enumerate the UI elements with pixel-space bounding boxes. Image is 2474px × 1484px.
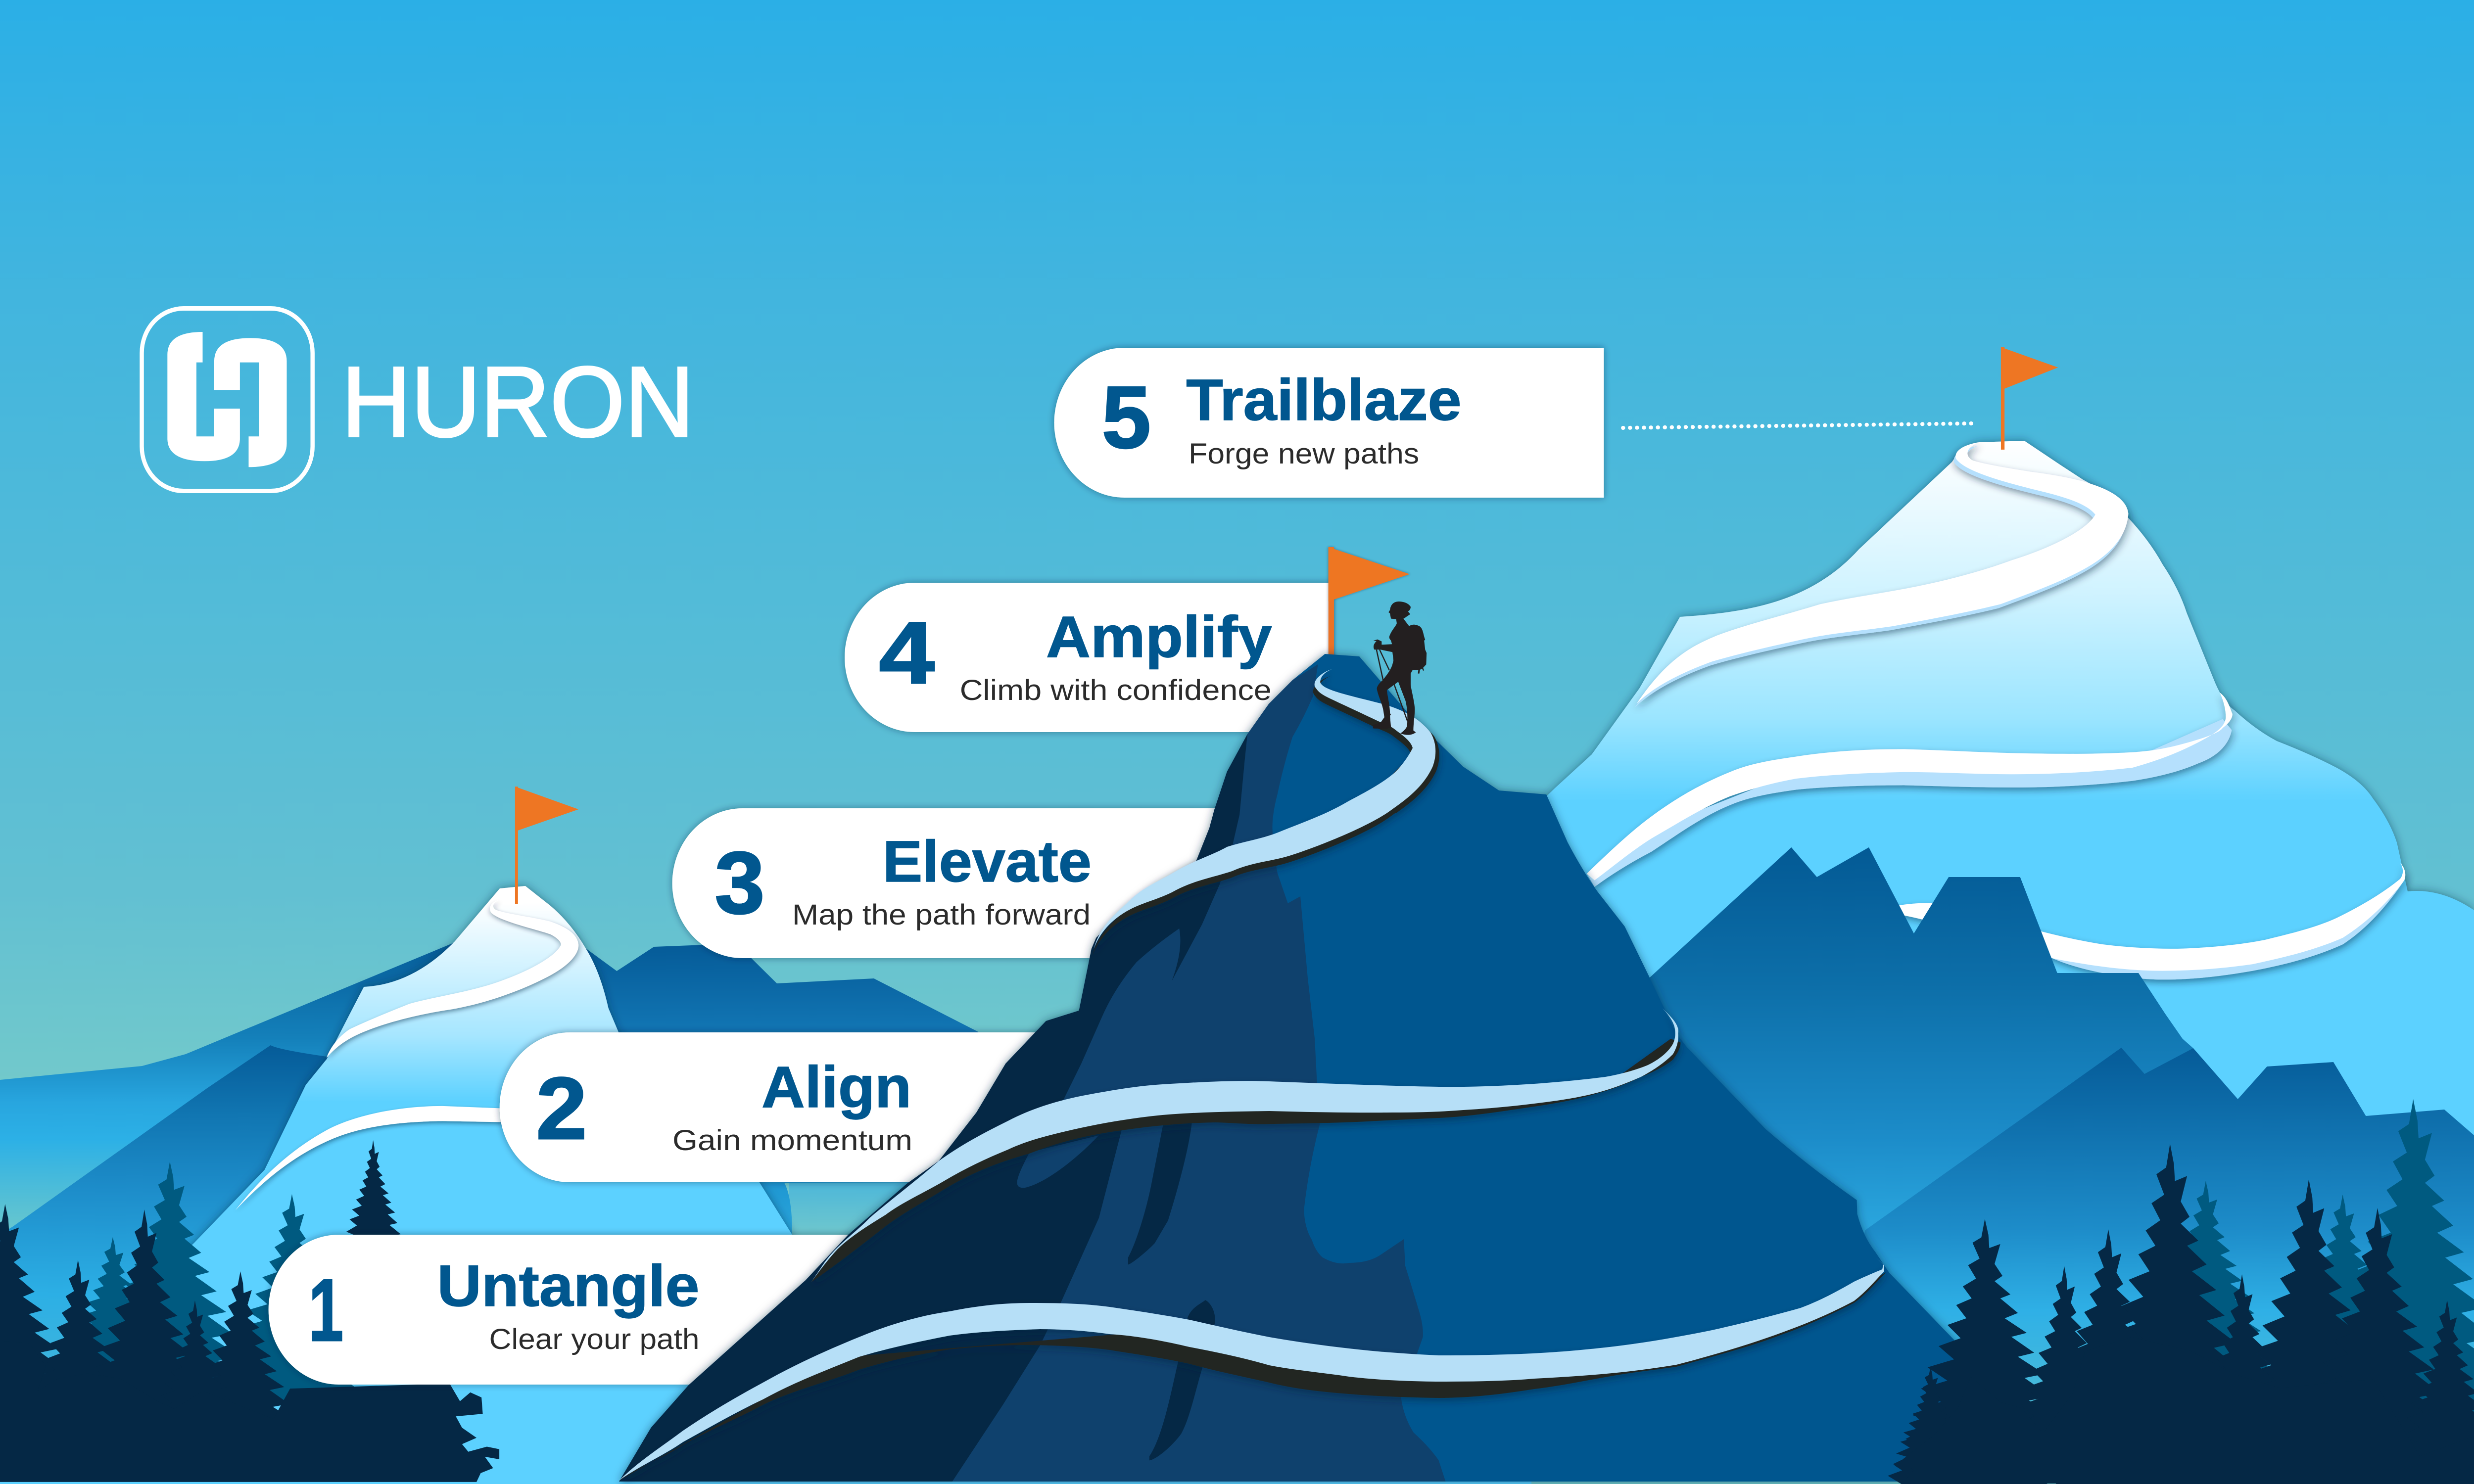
dark streak upper [1128,1121,1192,1264]
left peak snow trail lower [236,1106,509,1210]
right peak flag [2001,347,2058,450]
front right mountain range [1810,1048,2474,1484]
center mountain [603,643,2074,1482]
front left mountain [0,1045,418,1484]
top snow trail [1093,669,1439,956]
patch of sky below step 2 [789,1180,938,1235]
subtitle: Clear your path [489,1323,699,1355]
subtitle: Gain momentum [672,1124,912,1156]
Huron logo [142,309,694,491]
front trees [0,1140,406,1469]
heading: Untangle [437,1253,699,1319]
hiker silhouette [1373,602,1427,735]
subtitle: Climb with confidence [960,674,1272,706]
left peak snow trail upper [327,900,578,1058]
hiker body [1373,602,1427,735]
center summit flag [1329,547,1410,659]
third snow trail [619,1257,1886,1481]
step 3 label: Elevate [672,808,1253,958]
snowy peak shape [0,886,792,1484]
trekking poles [1377,649,1408,721]
dark streak lower [1149,1300,1215,1460]
second snow trail [811,1008,1680,1282]
mountain silhouette [619,654,2074,1482]
logo badge outline [142,309,313,491]
heading: Align [761,1055,911,1120]
back trees [51,1161,362,1419]
number: 5 [1102,368,1151,466]
far left mountain range [0,942,511,1484]
subtitle: Forge new paths [1189,437,1419,469]
step 5 label: Trailblaze [1054,348,1604,498]
left snowy peak [0,787,792,1484]
number: 4 [879,603,935,702]
step 2 label: Align [500,1032,1114,1182]
step 4 label: Amplify [845,583,1332,732]
forest ground [1903,1337,2474,1481]
subtitle: Map the path forward [792,898,1091,930]
heading: Trailblaze [1186,368,1461,433]
right snowy peak [1531,347,2474,1484]
number: 2 [536,1059,587,1158]
darkest facet [603,734,1247,1482]
pill [672,808,1253,958]
wordmark: HURON [341,346,694,458]
bottom edge strip [603,1482,2474,1484]
right peak snow trail middle [1587,693,2233,887]
right peak snow trail top [1635,442,2128,707]
left forest [0,1140,499,1482]
number: 1 [309,1261,343,1359]
number: 3 [714,834,765,932]
mid facet [603,643,1446,1482]
pill [269,1235,928,1385]
back right mountain range [1650,847,2474,1484]
mid mountain range behind step labels [557,945,978,1235]
mid finger under second trail [1017,1135,1099,1188]
pill [500,1032,1114,1182]
front trees [1888,1144,2474,1484]
step 1 label: Untangle [269,1235,928,1385]
shaded facets [603,643,1446,1482]
pill [1054,348,1604,498]
left peak flag [515,787,578,904]
logo mark [167,332,287,467]
heading: Elevate [883,829,1092,894]
back trees [2139,1099,2474,1455]
right peak snow trail bottom [1892,863,2405,979]
right forest [1888,1099,2474,1484]
pill [845,583,1332,732]
heading: Amplify [1046,604,1272,670]
dotted line from step 5 to right peak [1623,423,1971,428]
snowy peak shape [1531,441,2474,1484]
forest ground [0,1341,499,1482]
